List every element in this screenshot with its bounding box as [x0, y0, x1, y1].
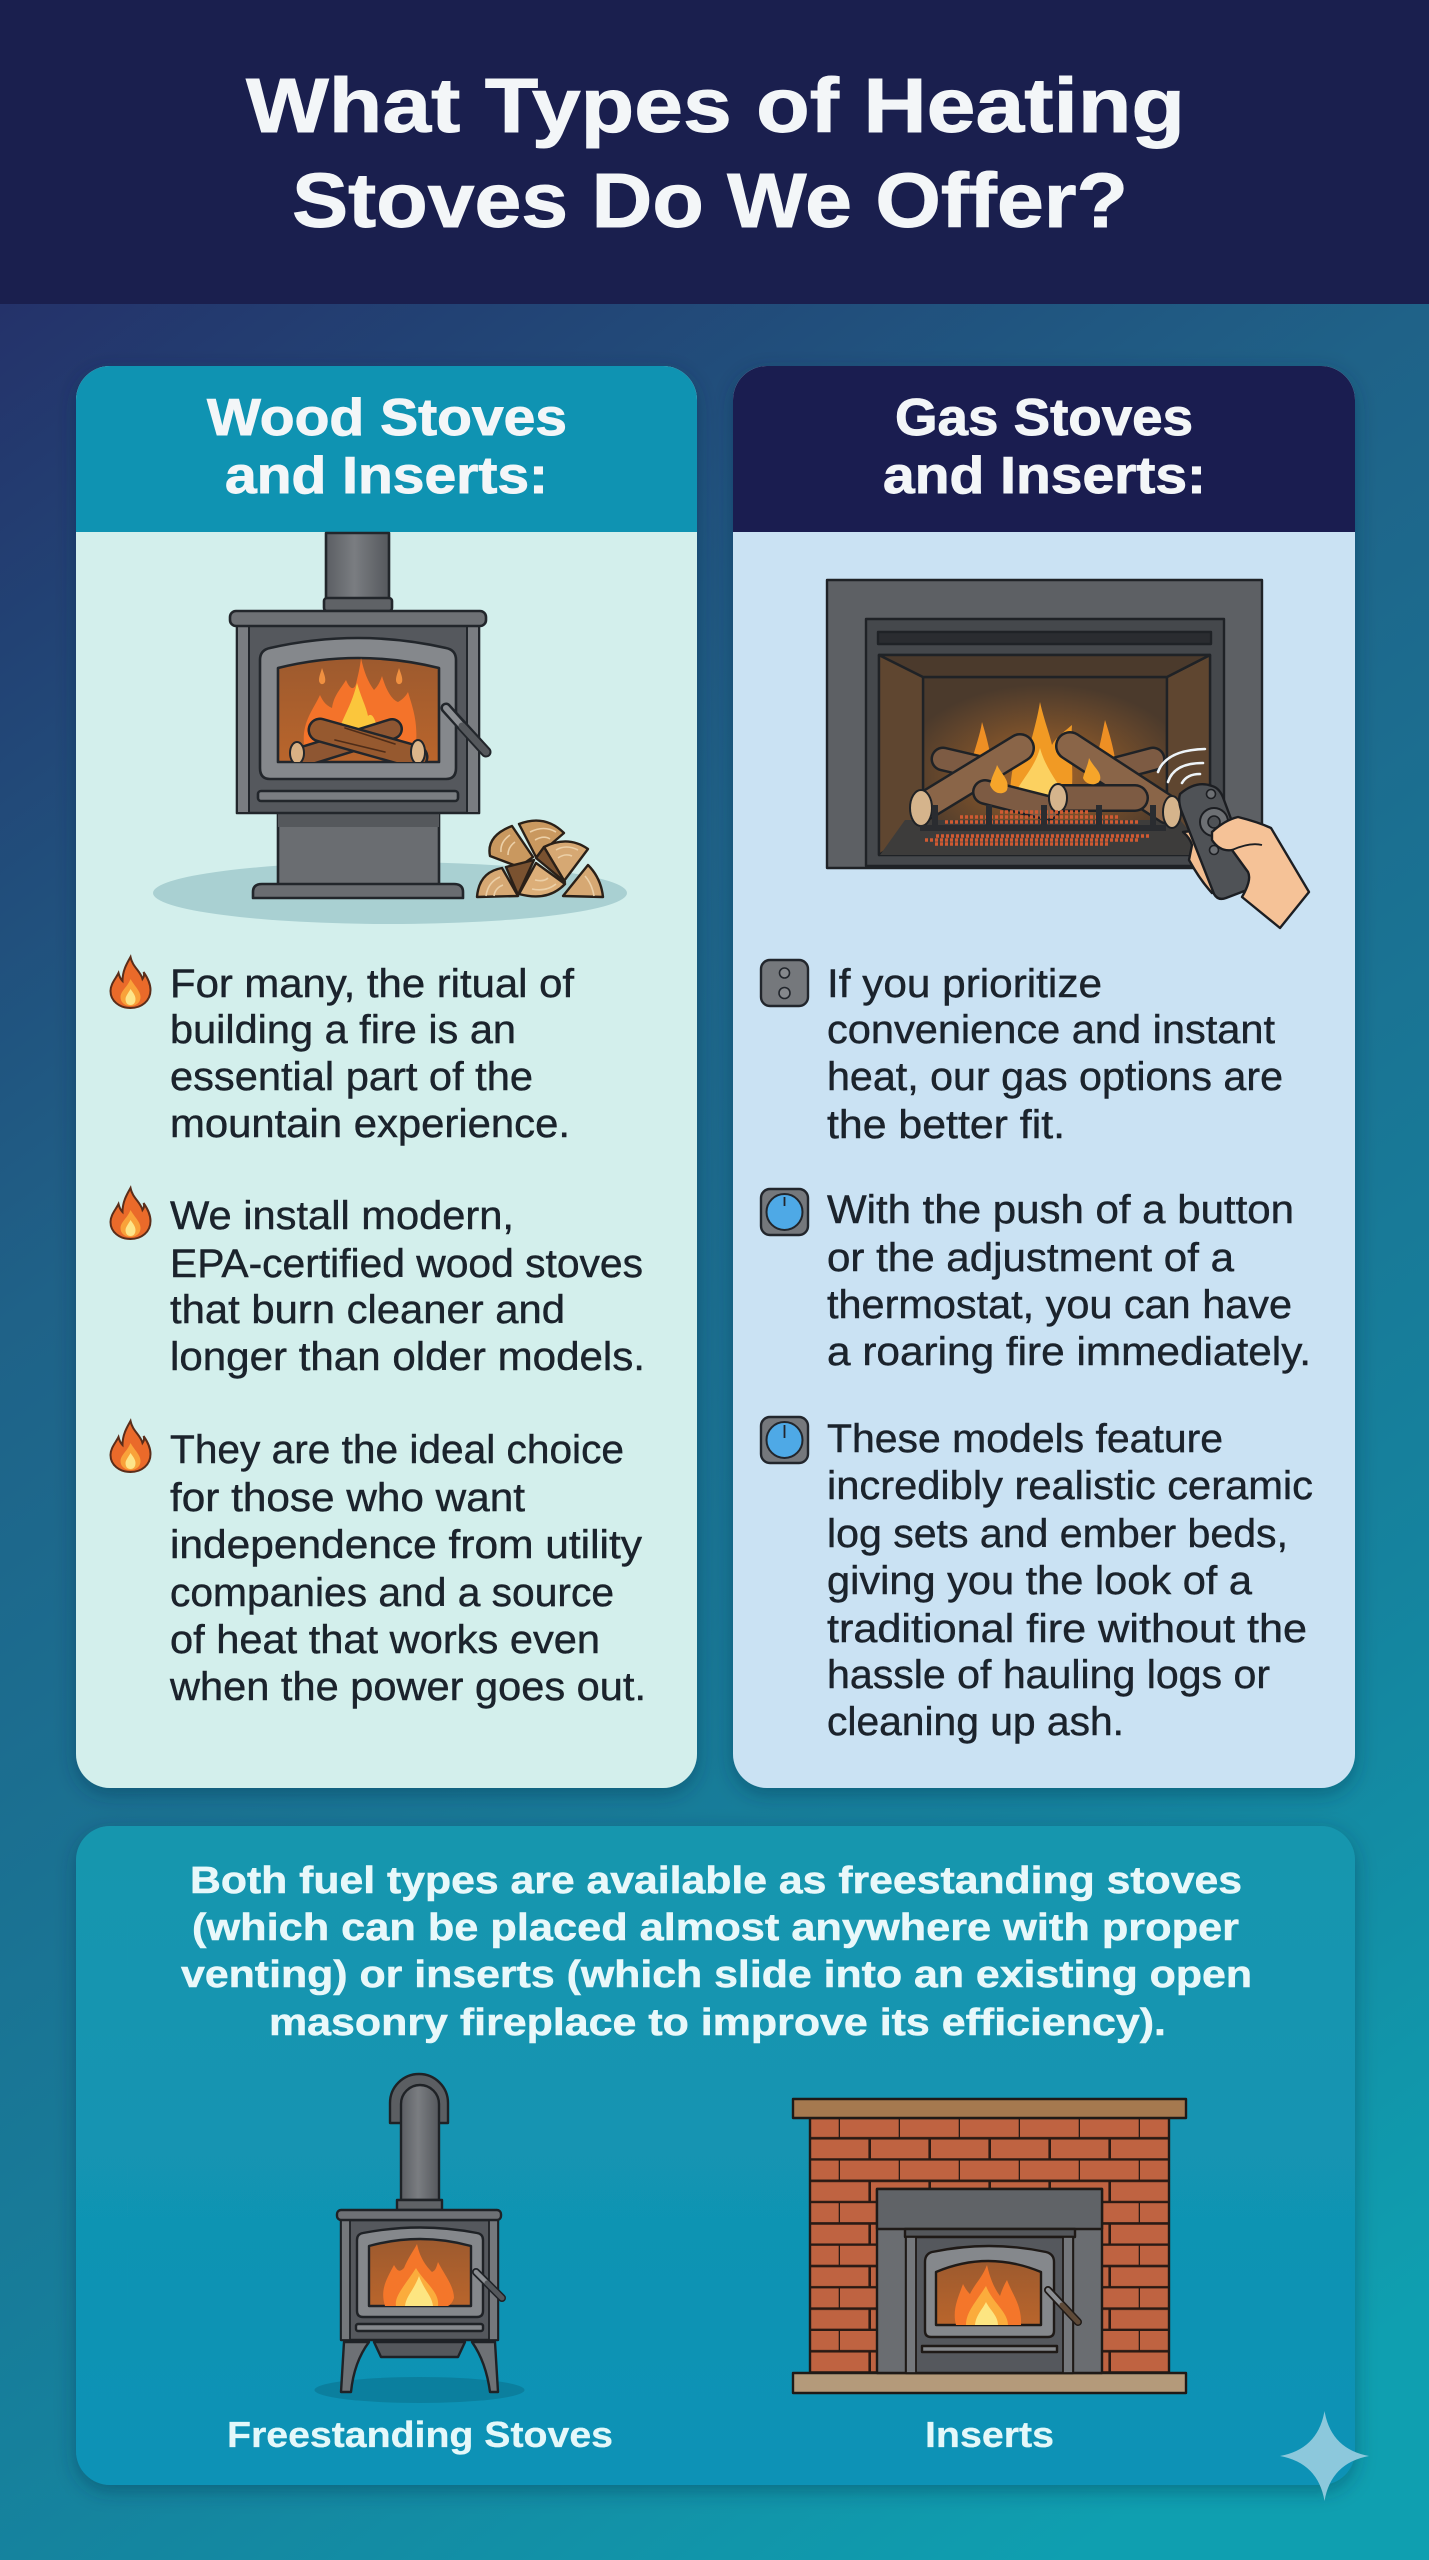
embers and grate — [925, 812, 1150, 844]
panel background — [76, 1826, 1355, 2485]
bullet: realistic logs: traditional fire without the — [827, 1607, 1307, 1651]
icon: flame — [110, 1188, 150, 1239]
bullet: realistic logs: hassle of hauling logs or — [827, 1653, 1270, 1697]
bullet: EPA-certified: longer than older models. — [170, 1335, 645, 1379]
title — [246, 63, 1185, 244]
ceramic logs — [910, 746, 1181, 828]
bullet: push of a button: With the push of a button — [827, 1188, 1294, 1232]
heading: Gas Stoves — [895, 389, 1193, 447]
heading: and Inserts: — [883, 447, 1206, 505]
summary text — [181, 1860, 1252, 2044]
bullet: realistic logs: incredibly realistic ceramic — [827, 1464, 1313, 1508]
panel: fuel type summary — [76, 1826, 1355, 2485]
illustration: wood stove — [153, 533, 627, 924]
icon: flame — [110, 1421, 150, 1472]
icon: sparkle — [1280, 2411, 1369, 2501]
panel header — [733, 366, 1355, 532]
bullet: push of a button: thermostat, you can have — [827, 1283, 1292, 1327]
bullet: independence: when the power goes out. — [169, 1665, 646, 1709]
bullet: realistic logs: log sets and ember beds, — [827, 1512, 1288, 1556]
bullet: EPA-certified: that burn cleaner and — [170, 1288, 565, 1332]
bullet: realistic logs: These models feature — [827, 1417, 1223, 1461]
bullet: convenience: If you prioritize — [827, 962, 1102, 1006]
panel body — [733, 366, 1355, 1788]
bullet: EPA-certified: We install modern, — [170, 1194, 514, 1238]
bullet: push of a button: or the adjustment of a — [827, 1236, 1235, 1280]
icon: remote wave arcs — [1158, 749, 1205, 783]
icon: two-button control — [761, 960, 808, 1006]
panel: gas stoves — [733, 366, 1355, 1788]
panel header — [76, 366, 697, 532]
bullet: independence — [110, 1421, 646, 1709]
bullet: convenience — [761, 960, 1283, 1147]
icon: thermostat dial — [761, 1417, 808, 1463]
heading: and Inserts: — [225, 447, 548, 505]
summary text: masonry fireplace to improve its efficiency). — [269, 2002, 1166, 2044]
bullet: convenience: the better fit. — [827, 1103, 1065, 1147]
title: What Types of Heating — [246, 63, 1185, 149]
bullet: independence: independence from utility — [170, 1523, 642, 1567]
bullet: push of a button — [761, 1188, 1311, 1374]
illustration: brick fireplace with insert — [793, 2099, 1186, 2393]
bullet: EPA-certified — [110, 1188, 645, 1379]
bullet: push of a button: a roaring fire immediately. — [827, 1330, 1311, 1374]
heading: Wood Stoves — [207, 389, 567, 447]
illustration: firewood pile — [477, 821, 603, 897]
bullet: convenience: convenience and instant — [827, 1008, 1275, 1052]
title: Stoves Do We Offer? — [292, 158, 1128, 244]
bullet: independence: They are the ideal choice — [170, 1428, 624, 1472]
summary text: venting) or inserts (which slide into an existing open — [181, 1954, 1252, 1996]
summary text: Both fuel types are available as freestanding stoves — [190, 1860, 1242, 1902]
heading — [883, 389, 1206, 505]
bullet: ritual — [110, 957, 575, 1146]
label: inserts: Inserts — [925, 2414, 1054, 2455]
illustration: gas insert — [827, 580, 1262, 868]
heading — [207, 389, 567, 505]
illustration: freestanding stove — [314, 2074, 524, 2403]
title banner — [0, 0, 1429, 304]
bullet: ritual: essential part of the — [170, 1055, 533, 1099]
bullet: realistic logs: giving you the look of a — [827, 1559, 1253, 1603]
panel body — [76, 366, 697, 1788]
bullet: independence: of heat that works even — [170, 1618, 600, 1662]
icon: thermostat dial — [761, 1189, 808, 1235]
label: freestanding stoves: Freestanding Stoves — [227, 2414, 613, 2455]
bullet: independence: companies and a source — [170, 1571, 614, 1615]
flames — [972, 702, 1116, 800]
summary text: (which can be placed almost anywhere with proper — [192, 1907, 1239, 1949]
bullet: ritual: For many, the ritual of — [170, 962, 575, 1006]
bullet: independence: for those who want — [170, 1476, 525, 1520]
icon: hand holding remote — [1179, 784, 1309, 928]
panel: wood stoves — [76, 366, 697, 1788]
bullet: realistic logs — [761, 1417, 1313, 1744]
bullet: ritual: building a fire is an — [170, 1008, 516, 1052]
bullet: EPA-certified: EPA-certified wood stoves — [170, 1242, 643, 1286]
bullet: realistic logs: cleaning up ash. — [827, 1700, 1124, 1744]
bullet: convenience: heat, our gas options are — [827, 1055, 1283, 1099]
icon: flame — [110, 957, 150, 1008]
bullet: ritual: mountain experience. — [170, 1102, 570, 1146]
